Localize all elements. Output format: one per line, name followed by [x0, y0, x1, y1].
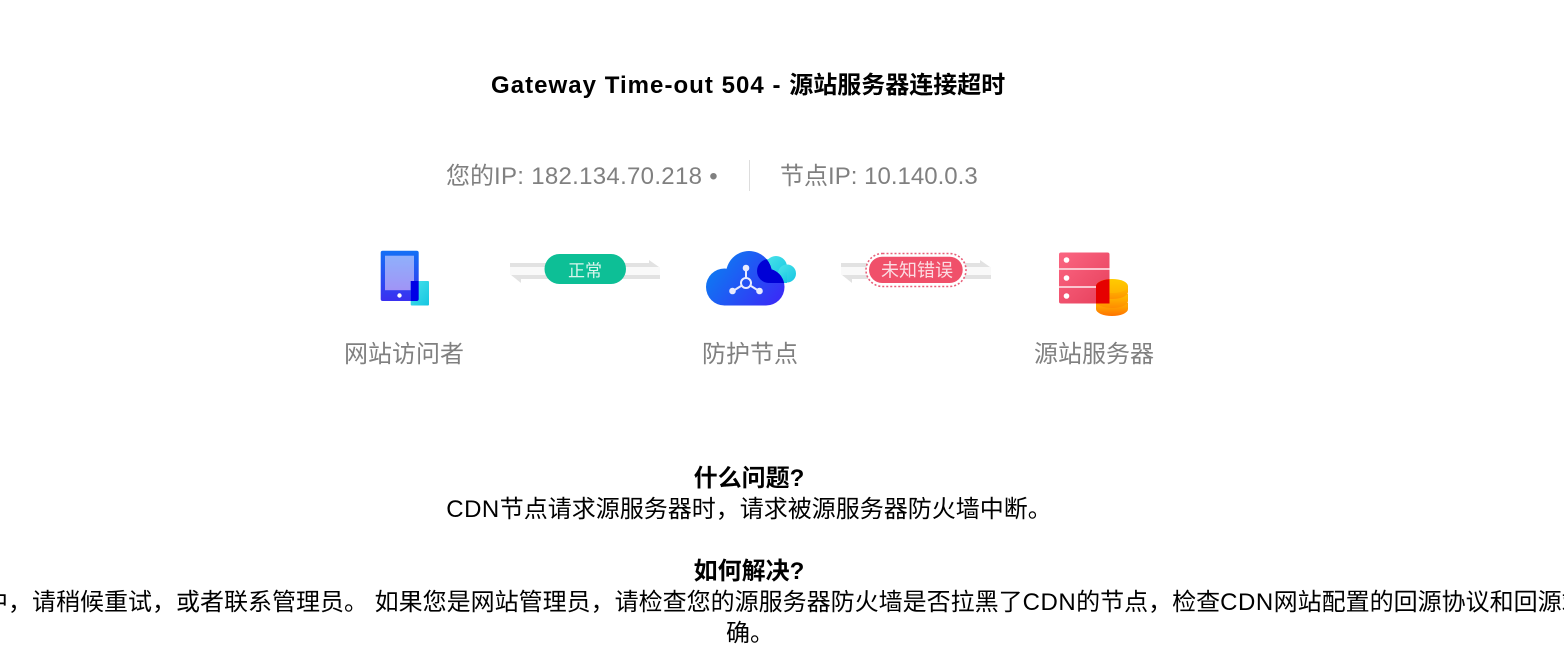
title: Gateway Time-out 504 - 源站服务器连接超时: [491, 72, 1005, 99]
heading: how to resolve: 如何解决?: [694, 558, 804, 585]
node IP: 节点IP: 10.140.0.3: [780, 163, 978, 190]
arrow: normal status: [510, 254, 660, 284]
heading: what problem: 什么问题?: [694, 465, 804, 492]
visitor IP: 您的IP: 182.134.70.218 •: [446, 163, 718, 190]
label: protection node: 防护节点: [702, 341, 798, 368]
arrow: normal status: 正常: [568, 262, 602, 280]
icon: visitor tablet: [380, 250, 429, 306]
arrow: unknown error status: 未知错误: [881, 260, 953, 280]
text: resolution last line: 确。: [726, 620, 774, 647]
text: problem description: CDN节点请求源服务器时，请求被源服务器防火墙中断。: [446, 496, 1052, 523]
arrow: unknown error status: [841, 252, 991, 288]
label: visitor: 网站访问者: [344, 341, 464, 368]
label: origin server: 源站服务器: [1034, 341, 1154, 368]
icon: origin server: [1059, 252, 1128, 316]
icon: protection node cloud: [706, 251, 796, 306]
